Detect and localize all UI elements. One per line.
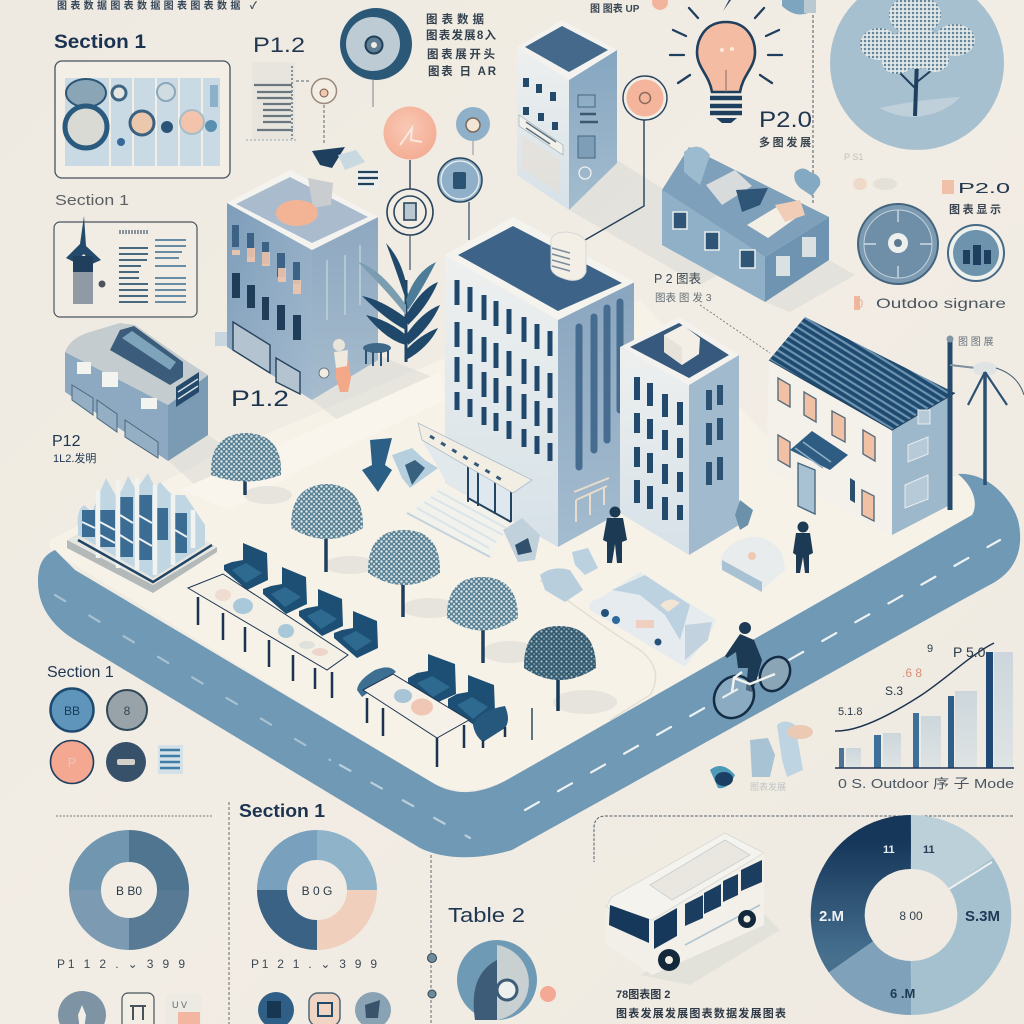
donut labels: 6 .M — [890, 986, 915, 1001]
text block: top centre caption: 图表 日 AR — [428, 64, 497, 78]
text block: top centre caption: 图表发展8入 — [426, 28, 496, 42]
icon: navy disc — [340, 8, 412, 107]
rooftop cube — [664, 325, 700, 365]
chart labels — [838, 643, 1014, 791]
plaza curved walkway — [540, 580, 656, 720]
heading: P1.2 top: P1.2 — [253, 34, 305, 57]
chart labels: .6 8 — [902, 666, 922, 680]
plants by entrance — [362, 438, 540, 562]
donut labels: 8 00 — [899, 909, 923, 923]
text: P12 caption: P12 — [52, 433, 81, 450]
lamp small — [531, 708, 533, 740]
connector lines and ring pin — [296, 78, 336, 145]
heading: Section 1 — [47, 664, 114, 681]
building: tall tower top centre — [517, 20, 617, 210]
greenhouse fence — [67, 473, 217, 593]
kiosk — [720, 500, 785, 592]
table plates — [215, 589, 328, 656]
text block: top centre caption — [426, 12, 497, 78]
text: right heading with peach mark: P2.0 — [958, 180, 1010, 197]
plates — [394, 689, 433, 716]
donut labels: 11 — [923, 844, 935, 856]
bus — [606, 833, 780, 985]
building: P1.2 mid left — [215, 170, 378, 400]
icon: lamp post and wind turbine — [946, 336, 1024, 510]
chair 6 — [448, 675, 495, 725]
heading: section 1 secondary: Section 1 — [55, 192, 129, 209]
small tower windows — [637, 377, 680, 520]
roadside sign cluster: 图表发展 — [750, 781, 786, 792]
road lane markings — [55, 540, 1000, 838]
long table with chairs — [188, 543, 378, 698]
text: right heading with peach mark — [942, 180, 1010, 216]
entrance of main tower — [407, 423, 532, 557]
icon grey blue — [355, 992, 391, 1024]
icon circle peach: P — [68, 755, 76, 770]
pin: small blue disc — [456, 107, 490, 155]
main tower windows right face — [579, 302, 620, 467]
front chair — [473, 706, 508, 748]
icon: lamp post and wind turbine: 图 图 展 — [958, 336, 994, 348]
main tower windows left face — [457, 280, 550, 461]
small blue icon top — [782, 0, 816, 14]
chart labels: P 5.0 — [953, 644, 986, 660]
icon: ringed photo — [948, 225, 1004, 281]
donut labels: 11 — [883, 844, 895, 856]
heading: section 1: Section 1 — [54, 31, 146, 53]
text: P12 caption — [52, 433, 96, 465]
text: right heading with peach mark: 图表显示 — [949, 202, 1001, 216]
building: blue box block — [662, 147, 829, 302]
heading: section 1 centre: Section 1 — [239, 801, 325, 821]
baseline and trend — [835, 767, 1014, 769]
plant: leafy frond — [358, 243, 440, 362]
chair 5 — [408, 654, 456, 704]
icon circle dark — [106, 742, 146, 782]
donut chart left — [85, 846, 173, 934]
donut centre label: B 0 G — [302, 884, 332, 898]
pin: blue ring — [438, 158, 482, 240]
text: P 2 annotation: P 2 图表 — [654, 272, 702, 286]
text: outdoor signage: 0 — [856, 296, 863, 311]
top caption near bulb — [590, 0, 668, 15]
timeline dots — [428, 954, 436, 998]
figure: person near kiosk — [793, 522, 813, 573]
roadside sign cluster — [710, 722, 813, 792]
mini document — [246, 62, 296, 140]
text: P2.0 caption: 多图发展 — [759, 135, 811, 149]
ground shadows — [168, 160, 855, 490]
donut chart centre — [272, 845, 362, 935]
building: main tower — [445, 217, 635, 547]
text block: top centre caption: 图表展开头 — [427, 47, 496, 61]
text: P12 caption: 1L2.发明 — [53, 451, 96, 465]
faded note — [844, 152, 897, 190]
heading: P2.0: P2.0 — [759, 107, 812, 132]
plaza installation — [540, 548, 716, 667]
tree 1 — [211, 433, 292, 504]
short table with chairs — [357, 654, 508, 767]
donut chart right — [819, 842, 1000, 1001]
pin: peach ring with leader line — [585, 76, 667, 240]
text: bus caption: 78图表图 2 — [616, 987, 670, 1001]
icon: small pennant — [312, 147, 379, 189]
text block: top centre caption: 图表数据 — [426, 12, 484, 26]
bar chart — [835, 643, 1014, 791]
icon circle grey: 8 — [124, 704, 131, 718]
chart labels: 9 — [927, 643, 933, 655]
text: bus caption — [616, 987, 786, 1020]
pin: peach balloon — [384, 106, 436, 195]
panel: section 1 header — [54, 31, 230, 317]
figure: person near tower — [603, 506, 627, 563]
panel: illustrated chart card — [55, 61, 230, 178]
tree 2 — [291, 484, 376, 574]
bars — [839, 652, 1013, 768]
icon grey tie — [58, 991, 106, 1024]
text: P 2 annotation — [654, 272, 770, 353]
icon: small round table — [363, 343, 391, 366]
figure: cyclist — [706, 622, 796, 726]
trees — [211, 433, 617, 714]
circle: table 2 disc — [457, 940, 556, 1020]
table legs — [198, 597, 332, 698]
chair 1 — [224, 543, 268, 590]
building: house — [766, 317, 955, 535]
wall sign sketch — [574, 478, 609, 522]
building: machine block — [65, 323, 208, 461]
icon peach card: U V — [172, 1000, 187, 1010]
caption under left donut: P1 1 2 . ⌄ 3 9 9 — [57, 957, 185, 971]
icon dark blue — [258, 992, 294, 1024]
tree 3 — [368, 530, 458, 618]
pin: ring icon below balloon — [387, 189, 433, 270]
icon small document — [158, 745, 183, 774]
chair back left — [357, 667, 396, 697]
building: small tower — [620, 317, 739, 555]
faded note: P S1 — [844, 152, 863, 162]
donut labels: S.3M — [965, 908, 1000, 925]
text: bus caption: 图表发展发展图表数据发展图表 — [616, 1006, 786, 1020]
icon: small blue heart pin — [794, 168, 820, 196]
road — [38, 474, 1020, 857]
caption under centre donut: P1 2 1 . ⌄ 3 9 9 — [251, 957, 377, 971]
table top — [188, 574, 348, 670]
heading: table 2: Table 2 — [448, 905, 525, 927]
rooftop unit — [551, 232, 586, 280]
text: outdoor signage — [854, 295, 1006, 311]
top caption text: 图表数据图表数据图表图表数据 ✓ — [57, 0, 258, 12]
top caption near bulb: 图 图表 UP — [590, 2, 640, 15]
icon peach card — [166, 994, 202, 1024]
chart labels: S.3 — [885, 684, 903, 698]
circle: tree emblem — [830, 0, 1004, 150]
table legs — [367, 698, 464, 767]
tree 5 — [524, 626, 617, 714]
icon: segmented dial — [858, 204, 938, 284]
heading: P1.2 at building: P1.2 — [231, 386, 289, 411]
dotted divider top of left donut — [56, 815, 213, 817]
icon: light bulb — [670, 0, 782, 123]
text: outdoor signage: Outdoo signare — [876, 295, 1006, 311]
chair 4 — [334, 611, 378, 658]
panel: turbine and text card — [54, 216, 197, 317]
chair 3 — [299, 589, 343, 636]
pale path strip — [180, 372, 445, 510]
donut labels: 2.M — [819, 908, 844, 925]
icon peach square — [309, 993, 340, 1024]
figure: person with peach apron — [319, 339, 351, 392]
icon circle blue: BB — [64, 704, 80, 718]
dotted vertical dividers — [229, 802, 431, 1024]
ground plate — [49, 300, 979, 790]
dashed bracket around bus — [594, 816, 1013, 862]
tree 4 — [447, 577, 538, 663]
dotted vertical connector — [812, 15, 814, 205]
text: P 2 annotation: 图表 图 发 3 — [655, 291, 712, 304]
icon document — [122, 993, 154, 1024]
chair 2 — [263, 567, 307, 614]
panel: section 1 icons — [47, 664, 183, 784]
chart labels: 0 S. Outdoor 序 子 Mode — [838, 776, 1014, 791]
donut centre label: B B0 — [116, 884, 142, 898]
table top — [363, 674, 469, 738]
icons bottom left — [58, 991, 391, 1024]
chart labels: 5.1.8 — [838, 706, 862, 718]
donut labels — [819, 844, 1000, 1001]
